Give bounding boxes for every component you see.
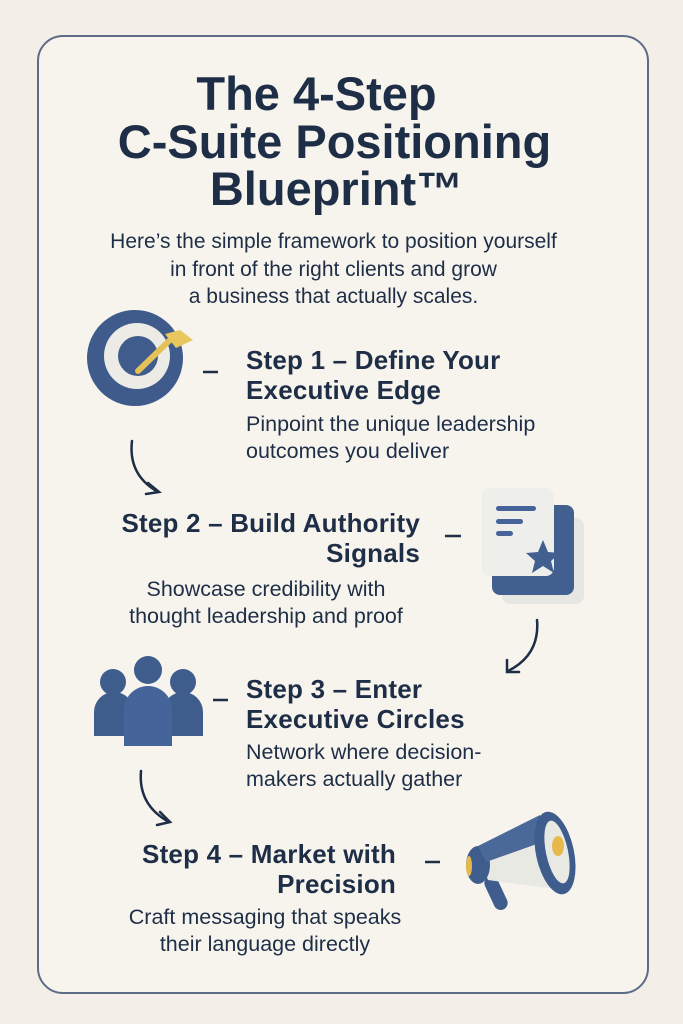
dashes bbox=[203, 372, 461, 862]
subtitle: in front of the right clients and grow bbox=[170, 258, 497, 280]
subtitle: a business that actually scales. bbox=[189, 285, 478, 308]
step 3 description: Network where decision- bbox=[246, 740, 481, 764]
step 4 description bbox=[129, 905, 401, 956]
step 4 heading: Step 4 – Market with bbox=[142, 839, 396, 869]
step 2 heading: Signals bbox=[326, 538, 420, 568]
icon: people bbox=[94, 656, 203, 746]
icon: target bbox=[87, 310, 193, 406]
step 1 description: Pinpoint the unique leadership bbox=[246, 412, 535, 436]
step 4 heading: Precision bbox=[277, 869, 396, 899]
step 3 description bbox=[246, 740, 481, 791]
title: C-Suite Positioning bbox=[118, 114, 551, 168]
arrow 2 bbox=[507, 620, 537, 672]
subtitle bbox=[110, 230, 557, 308]
step 2 heading bbox=[121, 508, 420, 568]
step 1 heading: Executive Edge bbox=[246, 375, 441, 405]
title: The 4-Step bbox=[196, 67, 437, 120]
arrow 3 bbox=[141, 771, 170, 825]
step 2 description bbox=[129, 577, 403, 628]
step 4 description: Craft messaging that speaks bbox=[129, 905, 401, 929]
step 3 heading: Executive Circles bbox=[246, 704, 465, 734]
step 3 heading: Step 3 – Enter bbox=[246, 674, 422, 704]
step 1 description: outcomes you deliver bbox=[246, 439, 449, 463]
step 2 description: Showcase credibility with bbox=[146, 577, 386, 601]
step 3 heading bbox=[246, 674, 465, 734]
step 2 heading: Step 2 – Build Authority bbox=[121, 508, 420, 538]
step 3 description: makers actually gather bbox=[246, 767, 462, 791]
subtitle: Here’s the simple framework to position yourself bbox=[110, 230, 557, 253]
step 2 description: thought leadership and proof bbox=[129, 604, 403, 628]
step 1 heading: Step 1 – Define Your bbox=[246, 345, 500, 375]
step 4 description: their language directly bbox=[160, 932, 370, 956]
arrow 1 bbox=[132, 441, 159, 494]
icon: megaphone bbox=[466, 808, 582, 912]
step 1 heading bbox=[246, 345, 500, 405]
step 1 description bbox=[246, 412, 535, 463]
title: Blueprint™ bbox=[210, 162, 463, 215]
step 4 heading bbox=[142, 839, 396, 899]
icon: documents with star bbox=[482, 488, 584, 604]
title bbox=[118, 67, 551, 215]
